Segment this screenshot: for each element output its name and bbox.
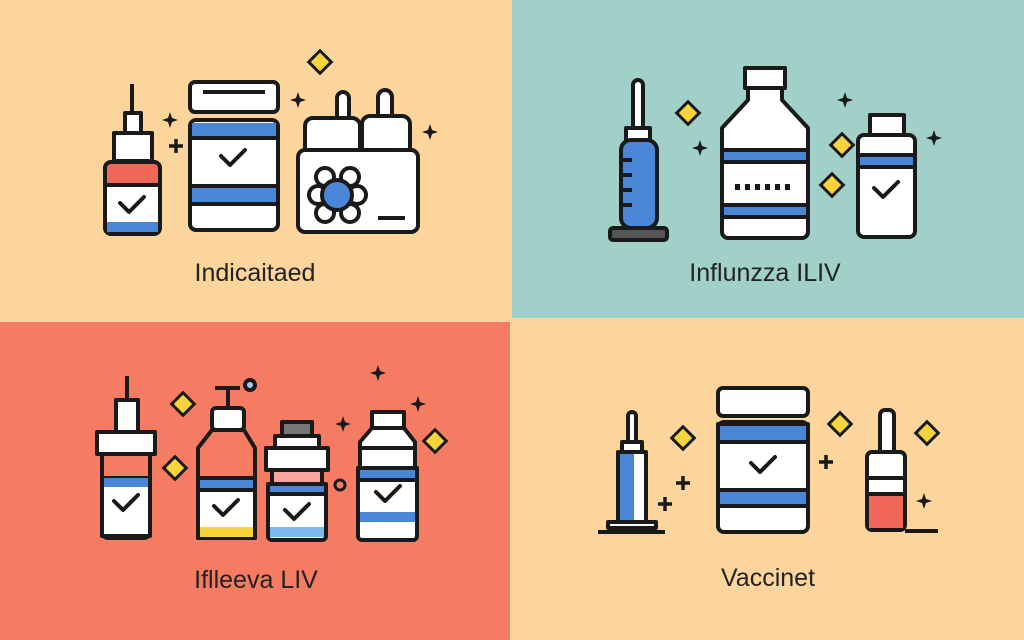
icon: jar: [718, 388, 808, 532]
icon: small vial: [105, 84, 160, 234]
icon: vial 4: [358, 412, 417, 540]
label: Indicaitaed: Indicaitaed: [195, 259, 315, 287]
panel: bottom-right: [512, 322, 1024, 640]
label: Influnzza ILIV: Influnzza ILIV: [689, 259, 841, 287]
icon: vial 3: [266, 422, 328, 540]
icon: vial: [867, 410, 938, 531]
icon: vial 1: [97, 376, 155, 538]
panel: top-right: [512, 0, 1024, 318]
icon: large bottle: [722, 68, 808, 238]
icon: small bottle: [858, 115, 915, 237]
label: Iflleeva LIV: Iflleeva LIV: [194, 566, 318, 594]
panel: top-left: [0, 0, 510, 318]
icon: big jar: [190, 82, 278, 230]
icon: syringe: [610, 80, 667, 240]
icon: vial 2: [198, 380, 255, 538]
label: Vaccinet: Vaccinet: [721, 564, 815, 592]
icon: syringe: [598, 412, 665, 532]
panel: bottom-left: [0, 322, 510, 640]
icon: kit box: [298, 90, 418, 232]
